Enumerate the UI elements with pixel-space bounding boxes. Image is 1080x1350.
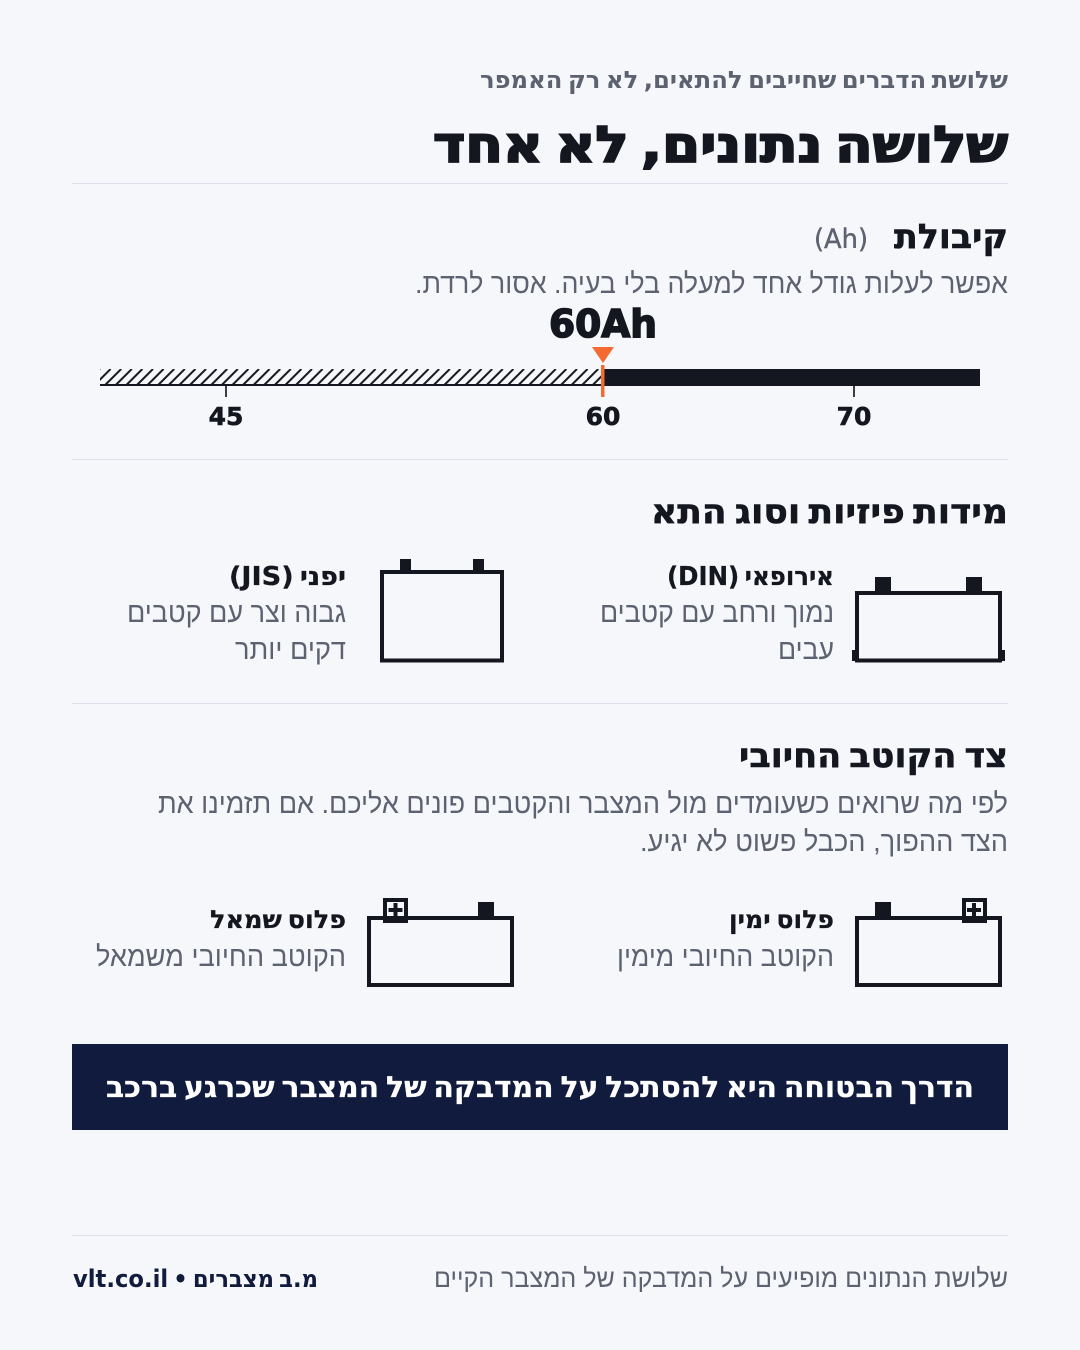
- description: plus left: הקוטב החיובי משמאל: [96, 941, 346, 972]
- label: plus right: פלוס ימין: [729, 905, 834, 934]
- capacity scale chart: 45: [209, 402, 243, 431]
- unit label: (Ah): [814, 224, 868, 255]
- description: Japanese: [127, 597, 346, 665]
- icon: JIS battery: [382, 559, 502, 660]
- capacity scale chart: [100, 347, 980, 431]
- description: European: נמוך ורחב עם קטבים: [600, 597, 834, 628]
- label: plus left: פלוס שמאל: [210, 905, 346, 934]
- header: [433, 66, 1008, 174]
- value label: 60Ah: [549, 302, 657, 346]
- footer note: שלושת הנתונים מופיעים על המדבקה של המצבר הקיים: [434, 1263, 1008, 1293]
- label: Japanese: יפני (JIS): [229, 562, 346, 592]
- heading: terminal: צד הקוטב החיובי: [739, 736, 1008, 776]
- terminal description: [158, 788, 1008, 857]
- description: plus right: הקוטב החיובי מימין: [617, 941, 834, 972]
- title: שלושה נתונים, לא אחד: [433, 116, 1008, 174]
- brand: מ.ב מצברים • vlt.co.il: [73, 1265, 318, 1293]
- terminal description: הצד ההפוך, הכבל פשוט לא יגיע.: [640, 826, 1008, 857]
- capacity description: אפשר לעלות גודל אחד למעלה בלי בעיה. אסור לרדת.: [415, 268, 1008, 299]
- heading: capacity: קיבולת: [894, 217, 1008, 257]
- capacity scale chart: 60: [586, 402, 620, 431]
- icon: DIN battery: [852, 577, 1005, 661]
- description: Japanese: דקים יותר: [235, 634, 346, 665]
- callout: הדרך הבטוחה היא להסתכל על המדבקה של המצבר שכרגע ברכב: [106, 1070, 974, 1104]
- description: European: עבים: [778, 634, 834, 665]
- panel: capacity: [100, 217, 1008, 431]
- eyebrow text: שלושת הדברים שחייבים להתאים, לא רק האמפר: [480, 66, 1008, 94]
- heading: size: מידות פיזיות וסוג התא: [651, 492, 1008, 532]
- terminal description: לפי מה שרואים כשעומדים מול המצבר והקטבים פונים אליכם. אם תזמינו את: [158, 788, 1008, 819]
- label: European: אירופאי (DIN): [667, 562, 834, 592]
- icon: battery plus left: [369, 900, 512, 985]
- description: European: [600, 597, 834, 665]
- callout: [72, 1044, 1008, 1130]
- panel: physical size: [127, 492, 1008, 665]
- capacity scale chart: 70: [837, 402, 871, 431]
- panel: positive terminal side: [96, 736, 1008, 985]
- description: Japanese: גבוה וצר עם קטבים: [127, 597, 346, 628]
- icon: battery plus right: [857, 900, 1000, 985]
- footer: [73, 1263, 1008, 1293]
